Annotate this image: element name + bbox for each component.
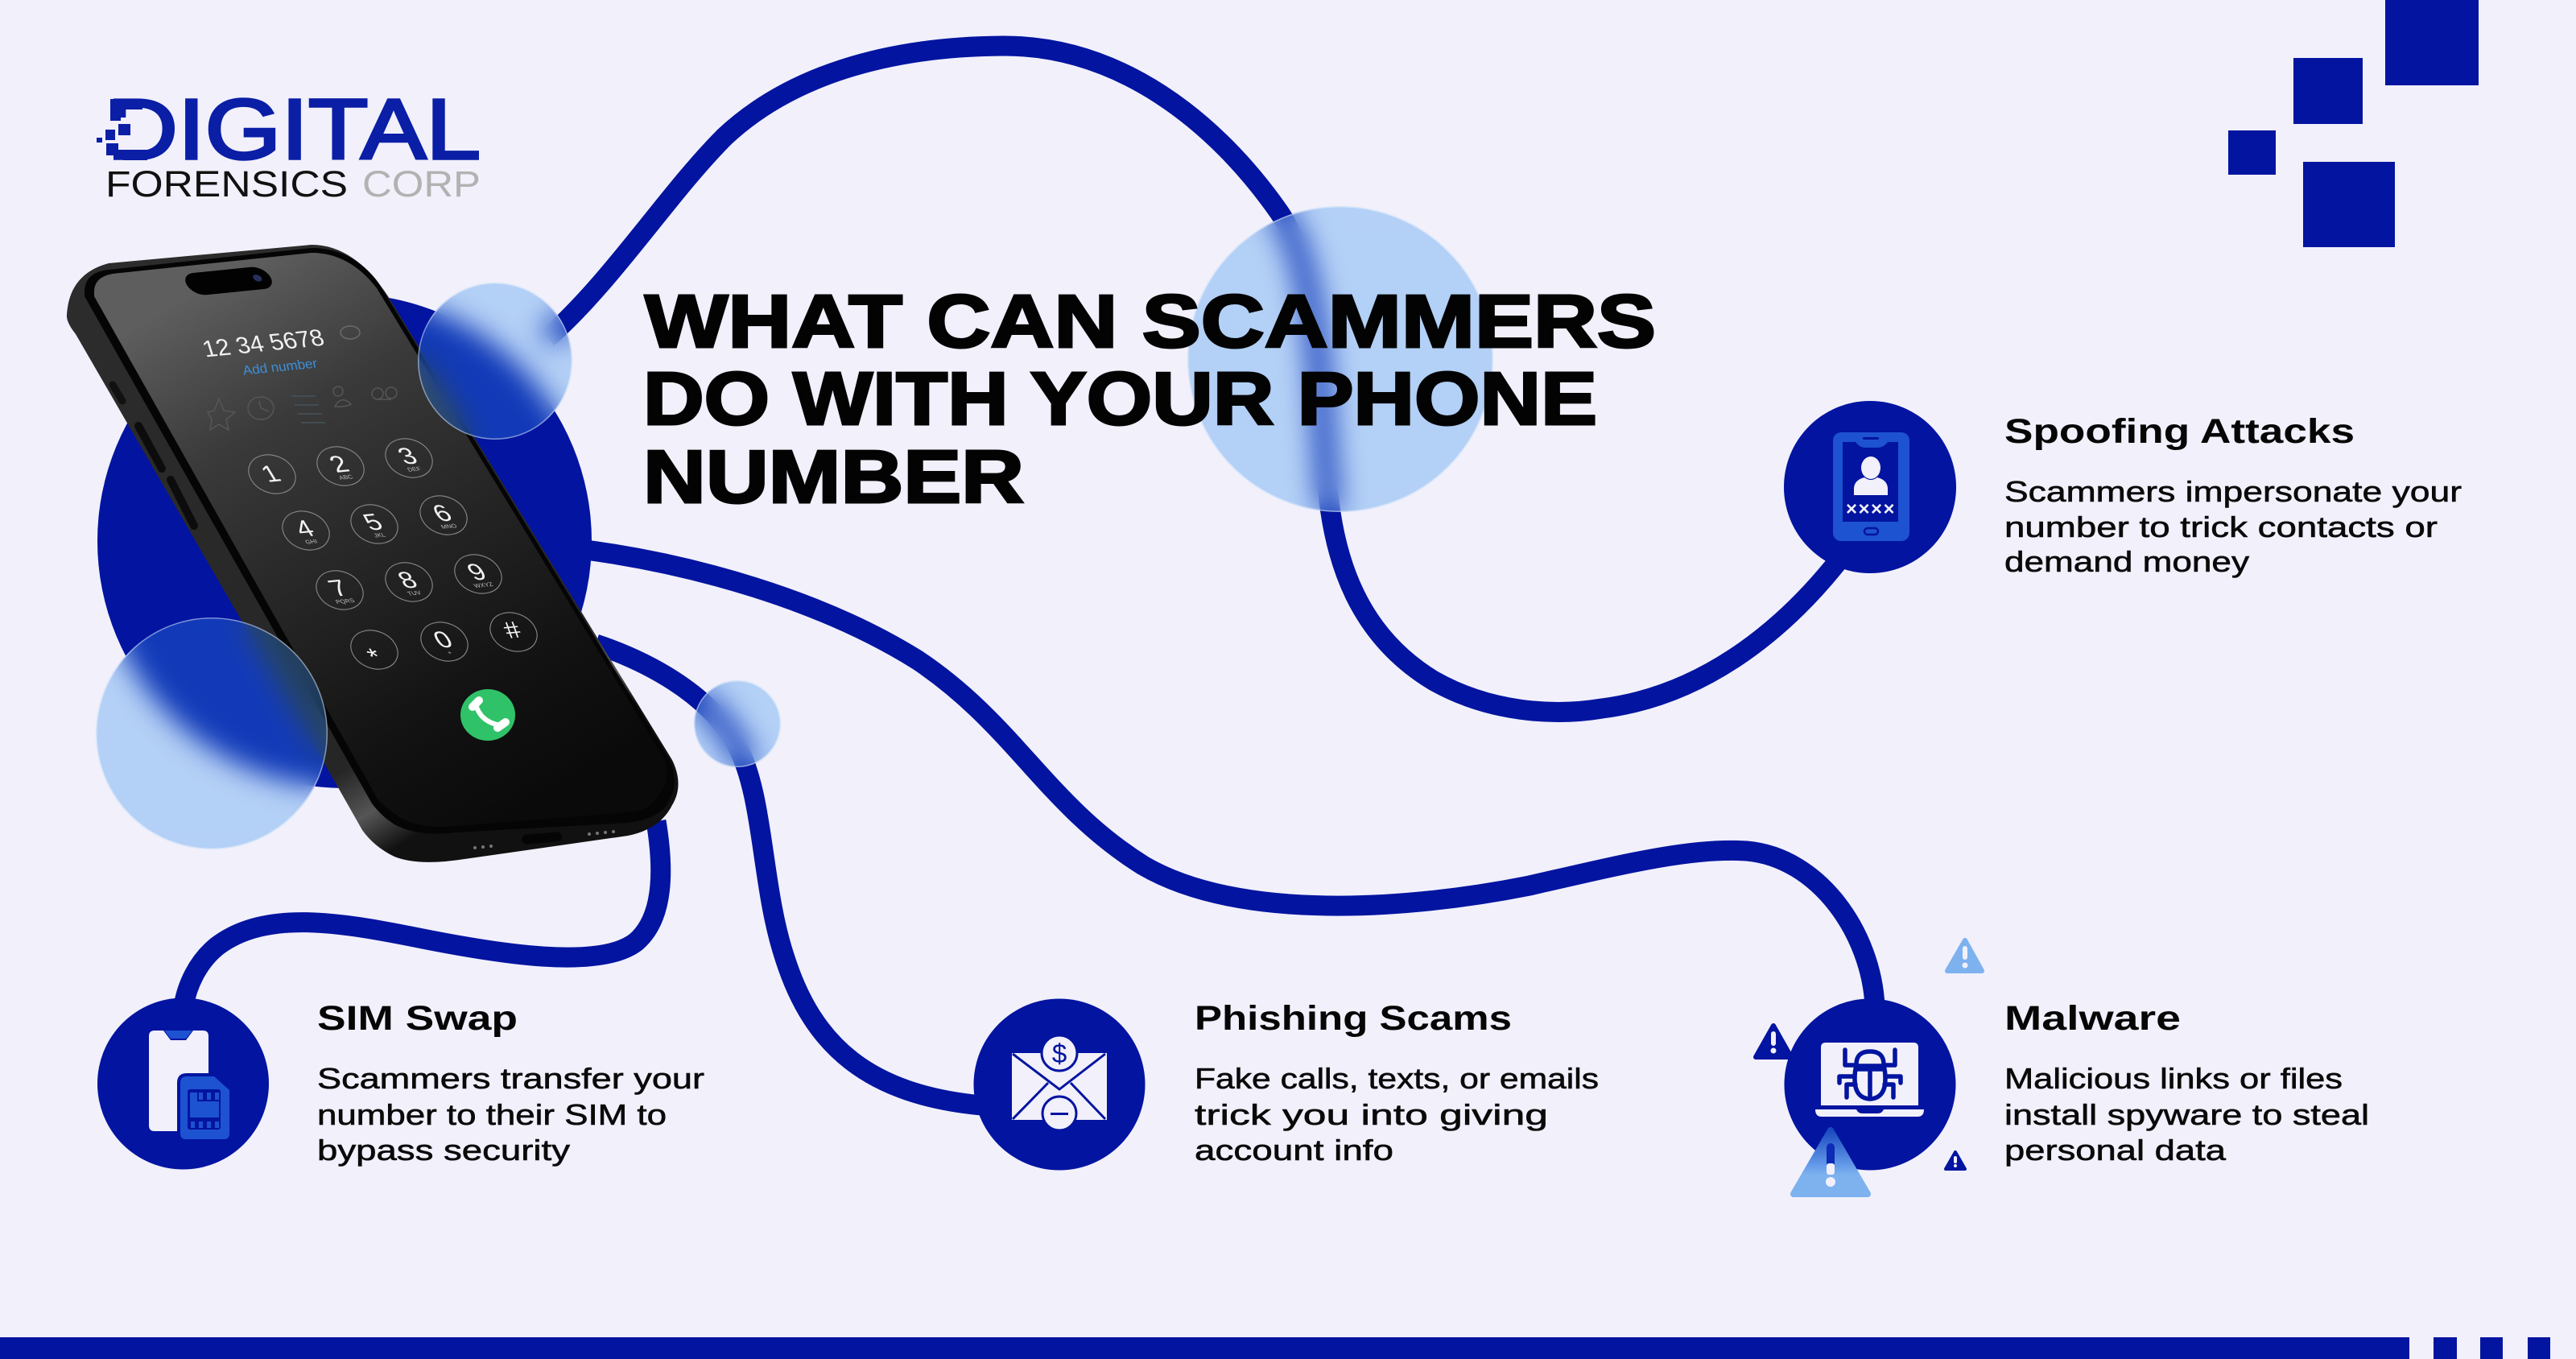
icon: warning triangles — [1756, 940, 1982, 1194]
curve to malware — [580, 549, 1875, 1006]
text: sim swap — [317, 999, 704, 1167]
glass circle: phone top right — [418, 283, 572, 440]
text: sim swap: number to their SIM to — [317, 1098, 667, 1131]
text: malware — [2004, 999, 2369, 1167]
curve to sim swap — [184, 821, 661, 1006]
curve to spoofing attacks — [547, 46, 1839, 712]
logo — [97, 82, 481, 204]
logo: FORENSICS — [105, 163, 348, 204]
add number link: Add number — [242, 356, 319, 378]
warning triangle left dark — [1756, 1026, 1791, 1057]
dialed number: 12 34 5678 — [199, 325, 328, 362]
dial keypad: WXYZ — [473, 581, 495, 589]
text: spoofing attacks: demand money — [2004, 545, 2249, 578]
backdrop circle behind phone — [97, 294, 592, 788]
footer bar — [0, 1337, 2550, 1359]
dial keypad: 0 — [427, 626, 458, 653]
decorative squares top right — [2228, 0, 2479, 247]
dial keypad: 6 — [427, 500, 457, 527]
glass circle: large top center — [1187, 206, 1493, 512]
dial keypad: * — [361, 643, 387, 670]
warning triangle small dark — [1946, 1152, 1965, 1169]
dial keypad: MNO — [440, 523, 458, 531]
icon: phishing scams — [974, 998, 1145, 1171]
icon: spoofing attacks — [1784, 401, 1956, 573]
warning triangle large — [1794, 1130, 1868, 1194]
phone illustration — [67, 245, 678, 862]
green call button — [460, 689, 515, 741]
icon: sim swap — [97, 998, 269, 1169]
title: NUMBER — [643, 435, 1024, 518]
logo: DIGITAL — [107, 82, 481, 177]
dial keypad — [243, 432, 543, 676]
connector curves — [184, 46, 1875, 1105]
warning triangle top light — [1947, 940, 1982, 971]
text: spoofing attacks: Scammers impersonate your — [2004, 475, 2462, 508]
front bezel — [85, 248, 675, 834]
text: sim swap: SIM Swap — [317, 999, 518, 1038]
dial keypad: PQRS — [334, 597, 356, 605]
glass circle: small connector node — [694, 680, 781, 767]
dial keypad: 2 — [324, 451, 354, 477]
dial keypad: TUV — [406, 589, 423, 597]
text: phishing scams: trick you into giving — [1195, 1098, 1548, 1131]
text: spoofing attacks: Spoofing Attacks — [2004, 412, 2355, 451]
dial keypad: 7 — [323, 575, 353, 601]
dial keypad: # — [497, 616, 527, 643]
text: sim swap: Scammers transfer your — [317, 1062, 704, 1095]
screen — [94, 253, 667, 827]
title — [643, 279, 1656, 518]
text: phishing scams — [1195, 999, 1599, 1167]
icon: spoofing attacks: ×××× — [1846, 498, 1896, 520]
backspace icon — [341, 326, 360, 339]
text: malware: Malicious links or files — [2004, 1062, 2343, 1095]
text: phishing scams: Fake calls, texts, or emails — [1195, 1062, 1599, 1095]
text: sim swap: bypass security — [317, 1134, 570, 1167]
dial keypad: JKL — [373, 531, 387, 539]
text: malware: personal data — [2004, 1134, 2227, 1167]
icon: malware — [1784, 998, 1956, 1171]
title: WHAT CAN SCAMMERS — [645, 279, 1656, 363]
logo: CORP — [362, 163, 481, 204]
dial keypad: DEF — [406, 465, 423, 473]
dial keypad: 3 — [392, 443, 423, 469]
glass circle: phone bottom left — [96, 618, 328, 849]
dial keypad: ABC — [337, 473, 354, 481]
title: DO WITH YOUR PHONE — [643, 357, 1597, 440]
bottom ports — [473, 830, 615, 849]
icon: phishing scams: $ — [1052, 1039, 1067, 1068]
curve to phishing scams — [596, 644, 982, 1105]
text: phishing scams: account info — [1195, 1134, 1393, 1167]
phone body — [67, 245, 678, 862]
text: spoofing attacks — [2004, 412, 2462, 578]
dial keypad: 1 — [255, 461, 286, 487]
dial keypad: 4 — [289, 515, 320, 542]
tab bar icons — [208, 386, 397, 430]
text: spoofing attacks: number to trick contacts or — [2004, 510, 2438, 543]
dial keypad: 8 — [392, 567, 423, 593]
dial keypad: 9 — [461, 559, 492, 585]
dial keypad: + — [446, 650, 454, 656]
dial keypad: GHI — [303, 538, 319, 545]
dial keypad: 5 — [357, 509, 388, 535]
dynamic island — [180, 266, 277, 296]
text: malware: install spyware to steal — [2004, 1098, 2369, 1131]
text: malware: Malware — [2004, 999, 2181, 1038]
side buttons — [113, 385, 194, 526]
text: phishing scams: Phishing Scams — [1195, 999, 1512, 1038]
